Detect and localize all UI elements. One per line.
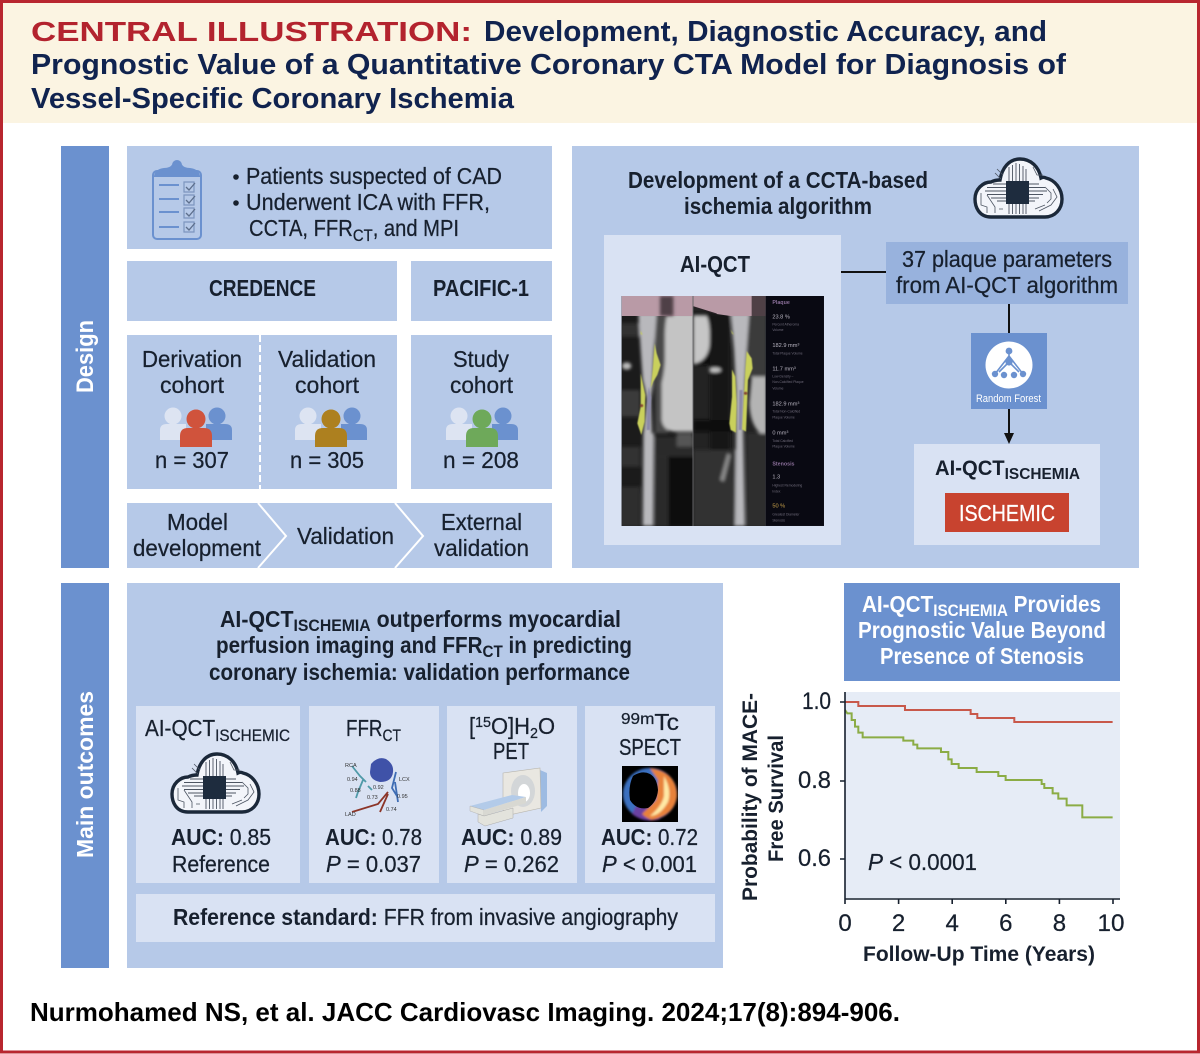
card: AI-QCT: AI-QCT [145,715,223,741]
patient bullets: CCTA, FFR [249,215,367,241]
icon: coronary tree [345,758,410,818]
validation cohort: cohort [295,372,360,398]
scan readout text: Low-Density – [772,375,794,379]
icon: coronary tree: 0.92 [373,785,384,791]
x tick labels: 6 [999,910,1012,937]
box: 37 plaque parameters: 37 plaque parameters [902,246,1112,272]
scan readout text: Total Calcified [772,439,793,443]
card: FFR-CT: AUC: 0.78 [325,824,422,850]
chevron process steps: External [441,509,522,535]
panel: AI-QCT scan [604,235,841,545]
p value: P < 0.0001 [868,849,977,875]
box: random forest [971,333,1047,409]
title banner: CENTRAL ILLUSTRATION: [31,16,472,47]
CT image [620,296,824,527]
icon: coronary tree: 0.94 [347,777,358,783]
card: AI-QCT [136,706,300,883]
icon: AI cloud [172,754,259,812]
panel: prognostic heading: AI-QCT [862,591,941,617]
panel: PACIFIC-1 [411,261,552,321]
scan readout text: Plaque Volume [772,445,795,449]
chevron process steps [127,503,552,568]
y tick labels: 0.8 [798,767,831,794]
panel: PACIFIC-1 study cohort: Study [453,346,509,372]
panel: PACIFIC-1 study cohort: n = 208 [443,447,519,473]
panel: AI-QCT ischemia output: ISCHEMIA [1005,466,1080,483]
panel: prognostic heading: Prognostic Value Beyond [858,617,1106,643]
reference standard: Reference standard: FFR from invasive angiography [173,904,678,930]
scan readout text: Stenosis [772,461,795,467]
panel: AI-QCT ischemia output: AI-QCT [935,457,1007,480]
validation cohort [278,346,376,473]
y axis title: Probability of MACE- [739,693,762,901]
scan readout text: Plaque Volume [772,416,795,420]
title banner [3,3,1197,123]
validation cohort: Validation [278,346,376,372]
card: SPECT: 99m [621,711,654,728]
scan readout text: 50 % [772,504,785,510]
scan readout text: Non-Calcified Plaque [772,380,804,384]
scan readout text [766,296,824,526]
heading: outperforms: in predicting [503,632,632,658]
title banner: Vessel-Specific Coronary Ischemia [31,83,515,115]
card: FFR-CT: CT [382,726,401,745]
panel: CREDENCE [127,261,397,321]
title banner: Prognostic Value of a Quantitative Coronary CTA Model for Diagnosis of [31,49,1067,81]
panel: prognostic heading [844,583,1120,681]
scan readout text: Greatest Diameter [772,512,800,516]
panel: PACIFIC-1 study cohort: cohort [450,372,514,398]
y tick labels [798,688,831,872]
derivation cohort: cohort [160,372,225,398]
scan readout text: 23.8 % [772,314,790,320]
panel: prognostic heading: Presence of Stenosis [880,643,1084,669]
card: PET: [ [469,713,475,739]
title banner: Development, Diagnostic Accuracy, and [484,16,1047,48]
scan readout text: Volume [772,328,784,332]
scan readout text: Index [772,489,781,493]
scan readout text: 0 mm³ [772,431,788,437]
heading: development: Development of a CCTA-based [628,167,928,193]
badge: ischemic [945,493,1069,532]
scan readout text: 182.9 mm³ [772,401,799,407]
card: AI-QCT: AUC: 0.85 [171,824,271,850]
panel: PACIFIC-1 study cohort [411,335,552,489]
scan readout text: Highest Remodeling [772,483,802,487]
icon: coronary tree: LCX [399,777,410,783]
citation: Nurmohamed NS, et al. JACC Cardiovasc Imaging. 2024;17(8):894-906. [30,997,900,1027]
axes [840,692,1120,904]
box: 37 plaque parameters [886,242,1128,304]
x tick labels: 0 [838,910,852,937]
card: PET: P = 0.262 [464,851,559,877]
chart: Kaplan-Meier survival [739,688,1124,966]
survival curves [845,702,1113,817]
y axis title: Free Survival [765,735,788,862]
panel: PACIFIC-1: PACIFIC-1 [433,275,529,301]
badge: ischemic: ISCHEMIC [959,500,1055,526]
sidebar: Main outcomes: Main outcomes [72,691,98,858]
card: PET: PET [493,738,529,764]
panel: prognostic heading: Provides [1008,591,1101,617]
icon: coronary tree: 0.73 [367,795,378,801]
card: PET: O [538,713,555,739]
patient bullets: CT [353,226,373,245]
scan readout text: Stenosis [772,518,785,522]
panel: algorithm development [572,146,1139,568]
panel: CREDENCE: CREDENCE [209,275,316,301]
icon: coronary tree: 0.95 [397,794,408,800]
x tick labels: 10 [1098,910,1124,937]
scan readout text: 1.3 [772,475,780,481]
panel: validation performance [127,583,723,968]
patient bullets [233,163,502,245]
card: PET: AUC: 0.89 [461,824,562,850]
heading: outperforms: coronary ischemia: validation performance [209,659,630,685]
card: FFR-CT: FFR [346,715,391,741]
chevron process steps: Validation [297,523,394,549]
patient bullets: Underwent ICA with FFR, [246,189,490,215]
icon: SPECT polar map [622,766,678,822]
card: SPECT [585,706,715,883]
heading: development [628,167,928,219]
heading: outperforms: outperforms myocardial [371,606,621,632]
scan readout text: 11.7 mm³ [772,366,796,372]
card: SPECT: SPECT [619,734,681,760]
card: SPECT: AUC: 0.72 [601,824,698,850]
validation cohort: n = 305 [290,447,364,473]
icon: coronary tree: RCA [345,763,357,769]
card: SPECT: P < 0.001 [602,851,697,877]
x tick labels [838,910,1124,937]
sidebar: Main outcomes [61,583,109,968]
scan readout text: Percent Atheroma [772,323,799,327]
patient bullets: , and MPI [373,215,459,241]
panel: CREDENCE cohorts [127,335,397,489]
scan readout text: Plaque [772,300,790,306]
card: SPECT: Tc [654,709,679,735]
scan readout text: Total Non-Calcified [772,410,800,414]
card: PET: 15 [475,714,491,731]
reference standard [136,894,715,942]
heading: outperforms: AI-QCT [220,606,299,632]
icon: PET scanner [470,768,547,826]
derivation cohort: Derivation [142,346,242,372]
heading: outperforms [209,606,632,685]
card: FFR-CT [309,706,439,883]
panel: prognostic heading: ISCHEMIA [933,601,1008,620]
derivation cohort: n = 307 [155,447,229,473]
heading: outperforms: ISCHEMIA [294,616,371,635]
card: PET: 2 [530,725,538,742]
sidebar: Design [61,146,109,568]
sidebar: Design: Design [72,320,99,393]
scan readout text: 182.9 mm³ [772,343,799,349]
icon: coronary tree: 0.74 [386,807,397,813]
scan readout text: Volume [772,386,784,390]
heading: outperforms: CT [482,642,503,661]
panel: patient criteria [127,146,552,249]
icon: clipboard checklist [153,161,201,239]
y axis title [739,693,788,901]
chevron process steps: Model [167,509,228,535]
card: FFR-CT: P = 0.037 [326,851,421,877]
y tick labels: 0.6 [798,845,831,872]
x axis title: Follow-Up Time (Years) [863,943,1095,966]
box: random forest: Random Forest [976,393,1041,405]
derivation cohort [142,346,242,473]
x tick labels: 2 [892,910,905,937]
x tick labels: 8 [1053,910,1066,937]
card: PET [447,706,577,883]
scan readout text: Total Plaque Volume [772,351,803,355]
chevron process steps: development [133,535,262,561]
icon: AI cloud [975,159,1062,217]
heading: development: ischemia algorithm [684,193,872,219]
x tick labels: 4 [946,910,959,937]
card: PET: O]H [491,713,530,739]
patient bullets: Patients suspected of CAD [246,163,502,189]
card: AI-QCT: ISCHEMIC [215,726,290,745]
icon: coronary tree: 0.88 [350,788,361,794]
box: 37 plaque parameters: from AI-QCT algorithm [896,272,1118,298]
card: AI-QCT: Reference [172,851,270,877]
chevron process steps: validation [434,535,529,561]
panel: AI-QCT ischemia output [914,444,1100,545]
heading: outperforms: perfusion imaging and FFR [216,632,514,658]
y tick labels: 1.0 [802,688,831,715]
icon: coronary tree: LAD [345,812,356,818]
arrow: random forest to ischemia output [1008,409,1010,434]
panel: AI-QCT scan: AI-QCT [680,251,750,277]
